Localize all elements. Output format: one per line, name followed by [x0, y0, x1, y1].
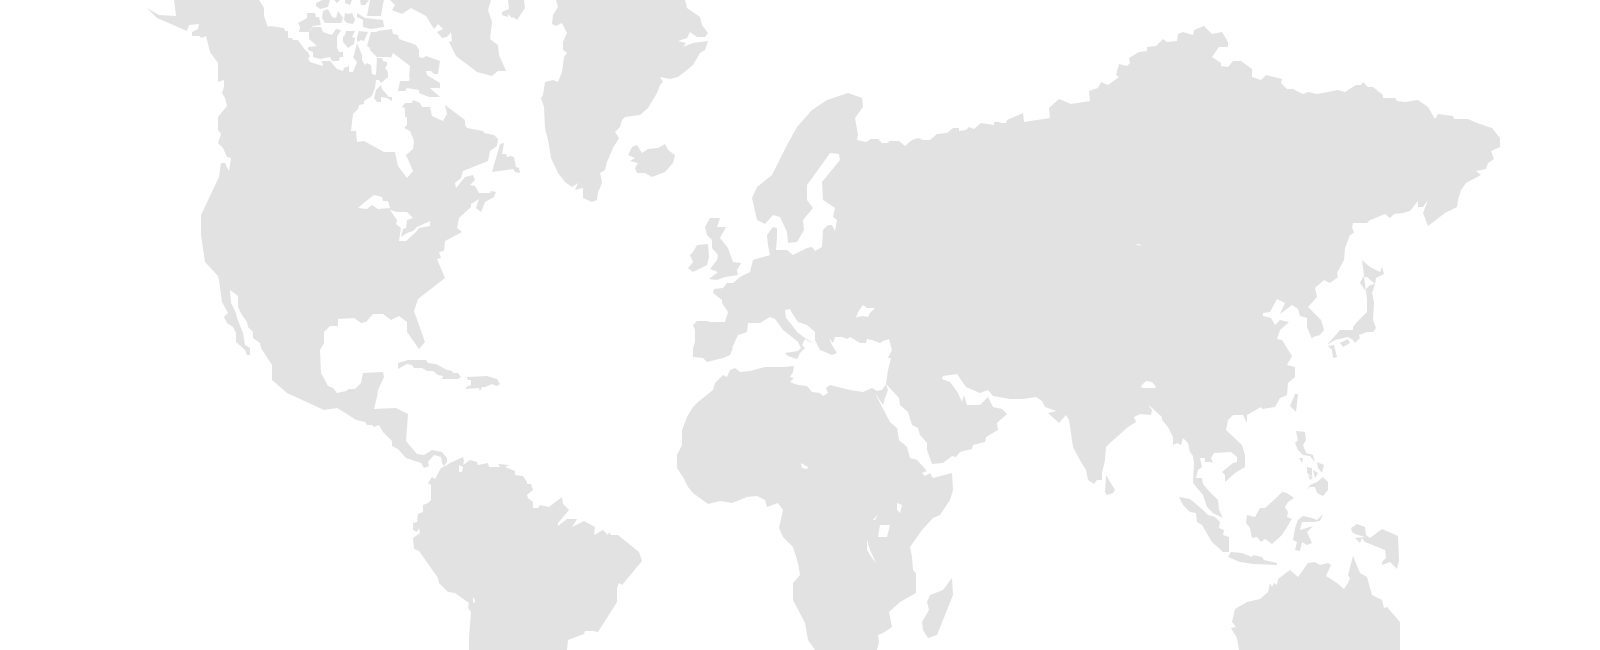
Taiwan [1290, 394, 1298, 412]
British Isles [688, 218, 741, 280]
North and Central America [147, 0, 525, 468]
Japan [1327, 260, 1384, 358]
Indonesia [1179, 492, 1323, 565]
Eurasia [693, 26, 1500, 518]
Madagascar [922, 578, 953, 638]
Australia [1231, 556, 1400, 650]
Sri Lanka [1105, 475, 1115, 495]
Iceland [628, 144, 675, 177]
South America [413, 457, 642, 650]
Greenland [541, 0, 708, 202]
Philippines [1295, 431, 1328, 496]
Africa [677, 366, 953, 650]
New Guinea [1351, 524, 1399, 569]
